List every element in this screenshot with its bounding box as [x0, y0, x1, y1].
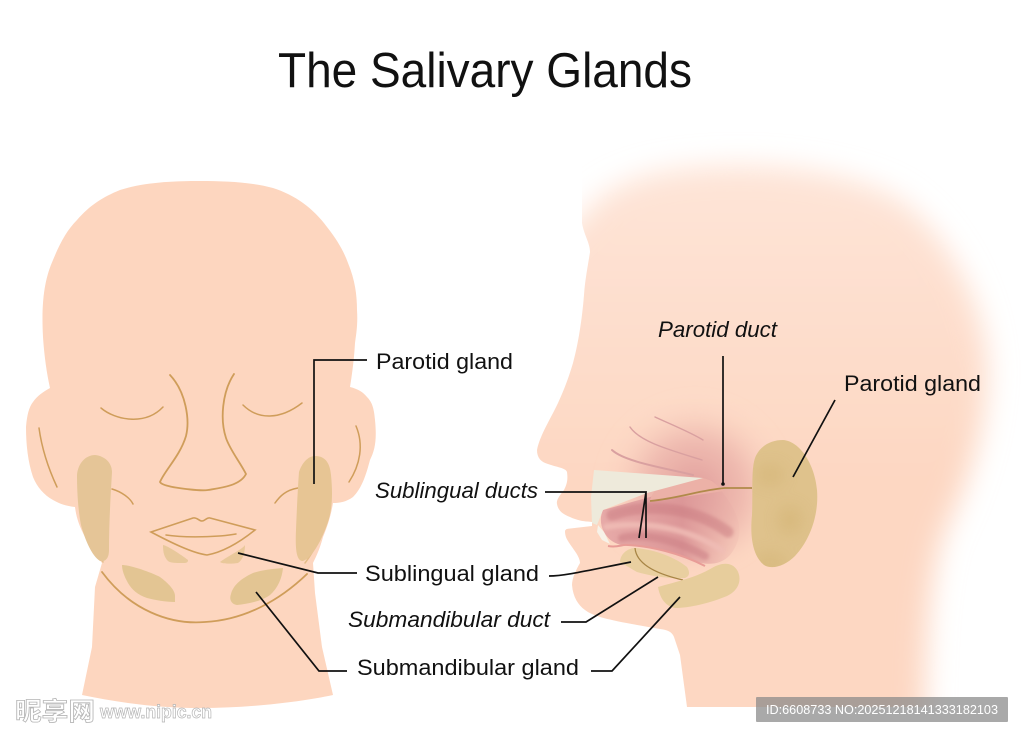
oral floor edge: [608, 545, 705, 566]
upper palate and teeth: [591, 470, 703, 525]
head with blurred crown and sharp profile: [537, 154, 1000, 707]
right submandibular gland: [230, 568, 283, 605]
pink band under palate: [650, 478, 724, 500]
label: submandibular gland: Submandibular gland: [357, 655, 579, 680]
submandibular gland side: [658, 564, 740, 608]
parotid duct: [650, 488, 752, 501]
label: side parotid gland: Parotid gland: [844, 371, 981, 396]
head outline: [26, 181, 376, 708]
watermark: id badge: [756, 697, 1008, 722]
label: sublingual gland: Sublingual gland: [365, 561, 539, 586]
mouth slit: [566, 520, 592, 529]
label: front parotid gland: Parotid gland: [376, 349, 513, 374]
mouth cavity: [601, 480, 739, 564]
lower teeth: [597, 525, 610, 544]
tongue and oral folds: [606, 508, 728, 556]
sublingual gland side: [620, 548, 689, 578]
watermark: id badge: ID:6608733 NO:20251218141333182103: [766, 702, 998, 717]
title: The Salivary Glands: [278, 44, 692, 98]
side view head: [537, 154, 1000, 707]
pointer lines: [238, 356, 835, 671]
pink cheek glow: [625, 418, 756, 559]
parotid gland side: [751, 440, 817, 570]
label: submandibular duct: Submandibular duct: [348, 607, 551, 632]
front view head: [26, 181, 376, 708]
wrinkle lines: [612, 417, 703, 475]
right sublingual gland: [220, 545, 245, 564]
label: sublingual ducts: Sublingual ducts: [375, 478, 538, 503]
right parotid gland: [296, 456, 332, 561]
face line drawing: [39, 374, 360, 622]
left submandibular gland: [122, 565, 175, 602]
watermark: site name: www.nipic.cn: [99, 702, 212, 722]
duct end marker: [721, 482, 725, 486]
left parotid gland: [77, 455, 112, 561]
submandibular duct line: [635, 548, 683, 580]
watermark: site name: [15, 698, 212, 726]
left sublingual gland: [163, 545, 188, 563]
watermark: site name: 昵享网: [15, 698, 95, 726]
label: parotid duct: Parotid duct: [658, 317, 778, 342]
